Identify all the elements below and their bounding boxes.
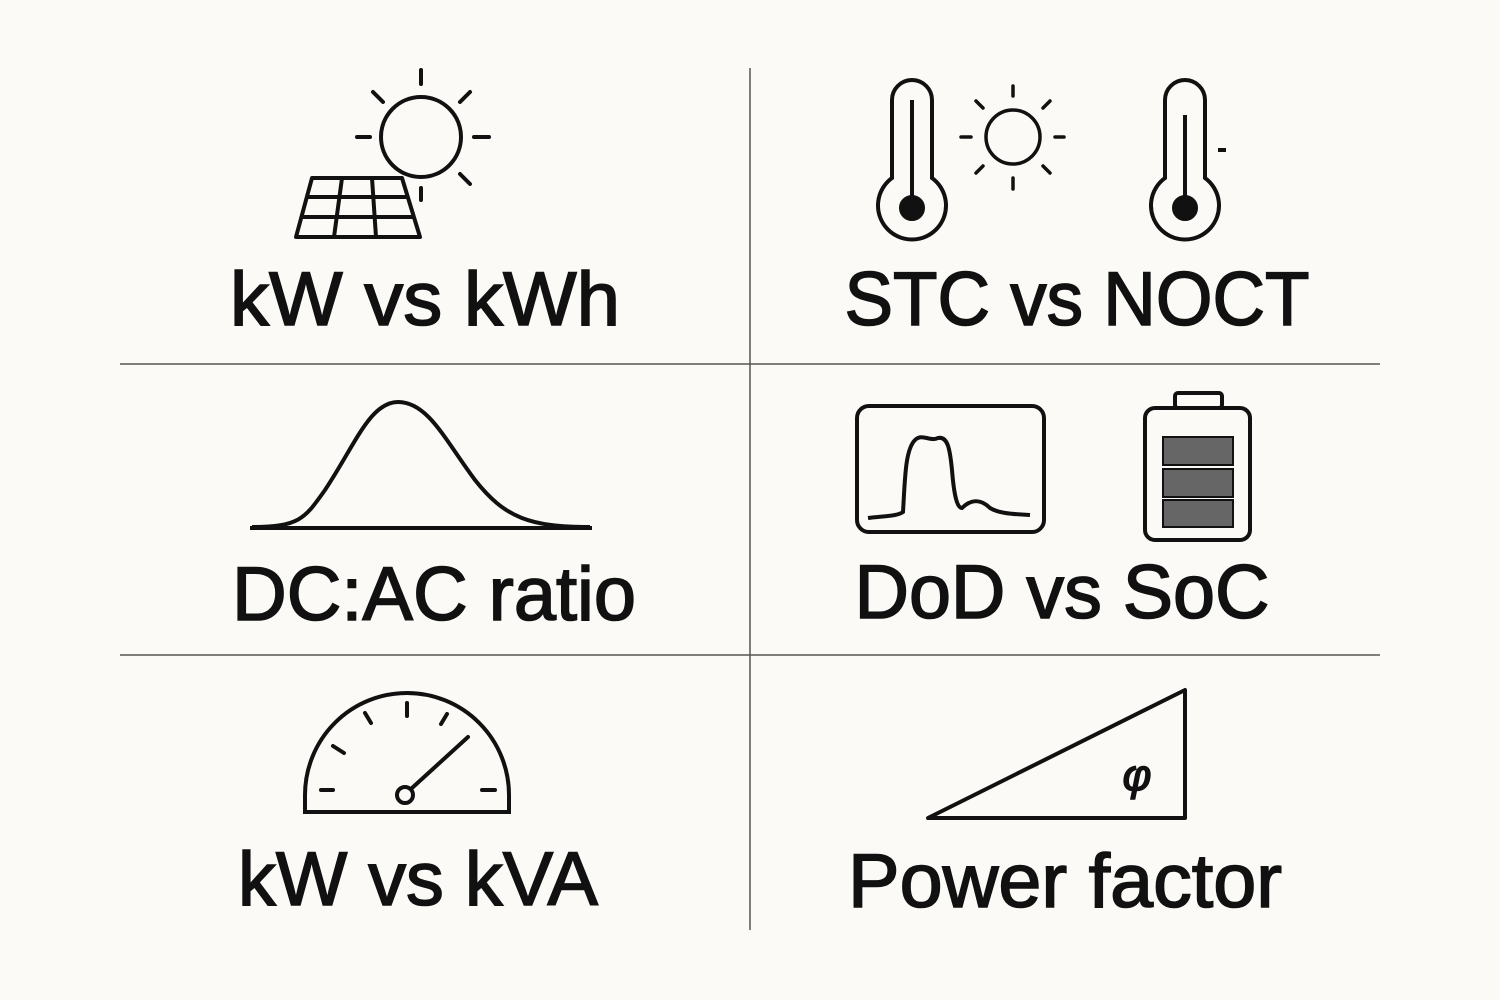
panel: kW vs kVA	[238, 693, 598, 922]
icon: sun	[357, 70, 489, 200]
chart: bell curve	[250, 402, 592, 528]
icon: battery	[1145, 393, 1250, 540]
panel: Power factor	[848, 690, 1282, 924]
icon: gauge	[305, 693, 509, 812]
icon: power triangle: φ	[1123, 751, 1151, 800]
icon: solar panel	[296, 178, 420, 237]
icon: thermometer right	[1151, 80, 1226, 239]
panel: STC vs NOCT	[844, 80, 1310, 342]
icon: thermometer left	[878, 80, 946, 239]
panel: DC:AC ratio	[232, 402, 636, 637]
panel: kW vs kWh	[230, 70, 620, 342]
icon: small sun	[961, 86, 1064, 189]
icon: monitor with waveform	[857, 406, 1044, 532]
heading: Power factor: Power factor	[848, 839, 1282, 924]
heading: DC:AC ratio: DC:AC ratio	[232, 552, 636, 637]
heading: DoD vs SoC: DoD vs SoC	[854, 550, 1270, 635]
panel: DoD vs SoC	[854, 393, 1270, 635]
heading: STC vs NOCT: STC vs NOCT	[844, 257, 1310, 342]
heading: kW vs kVA: kW vs kVA	[238, 837, 598, 922]
heading: kW vs kWh: kW vs kWh	[230, 257, 620, 342]
icon: power triangle	[928, 690, 1185, 818]
